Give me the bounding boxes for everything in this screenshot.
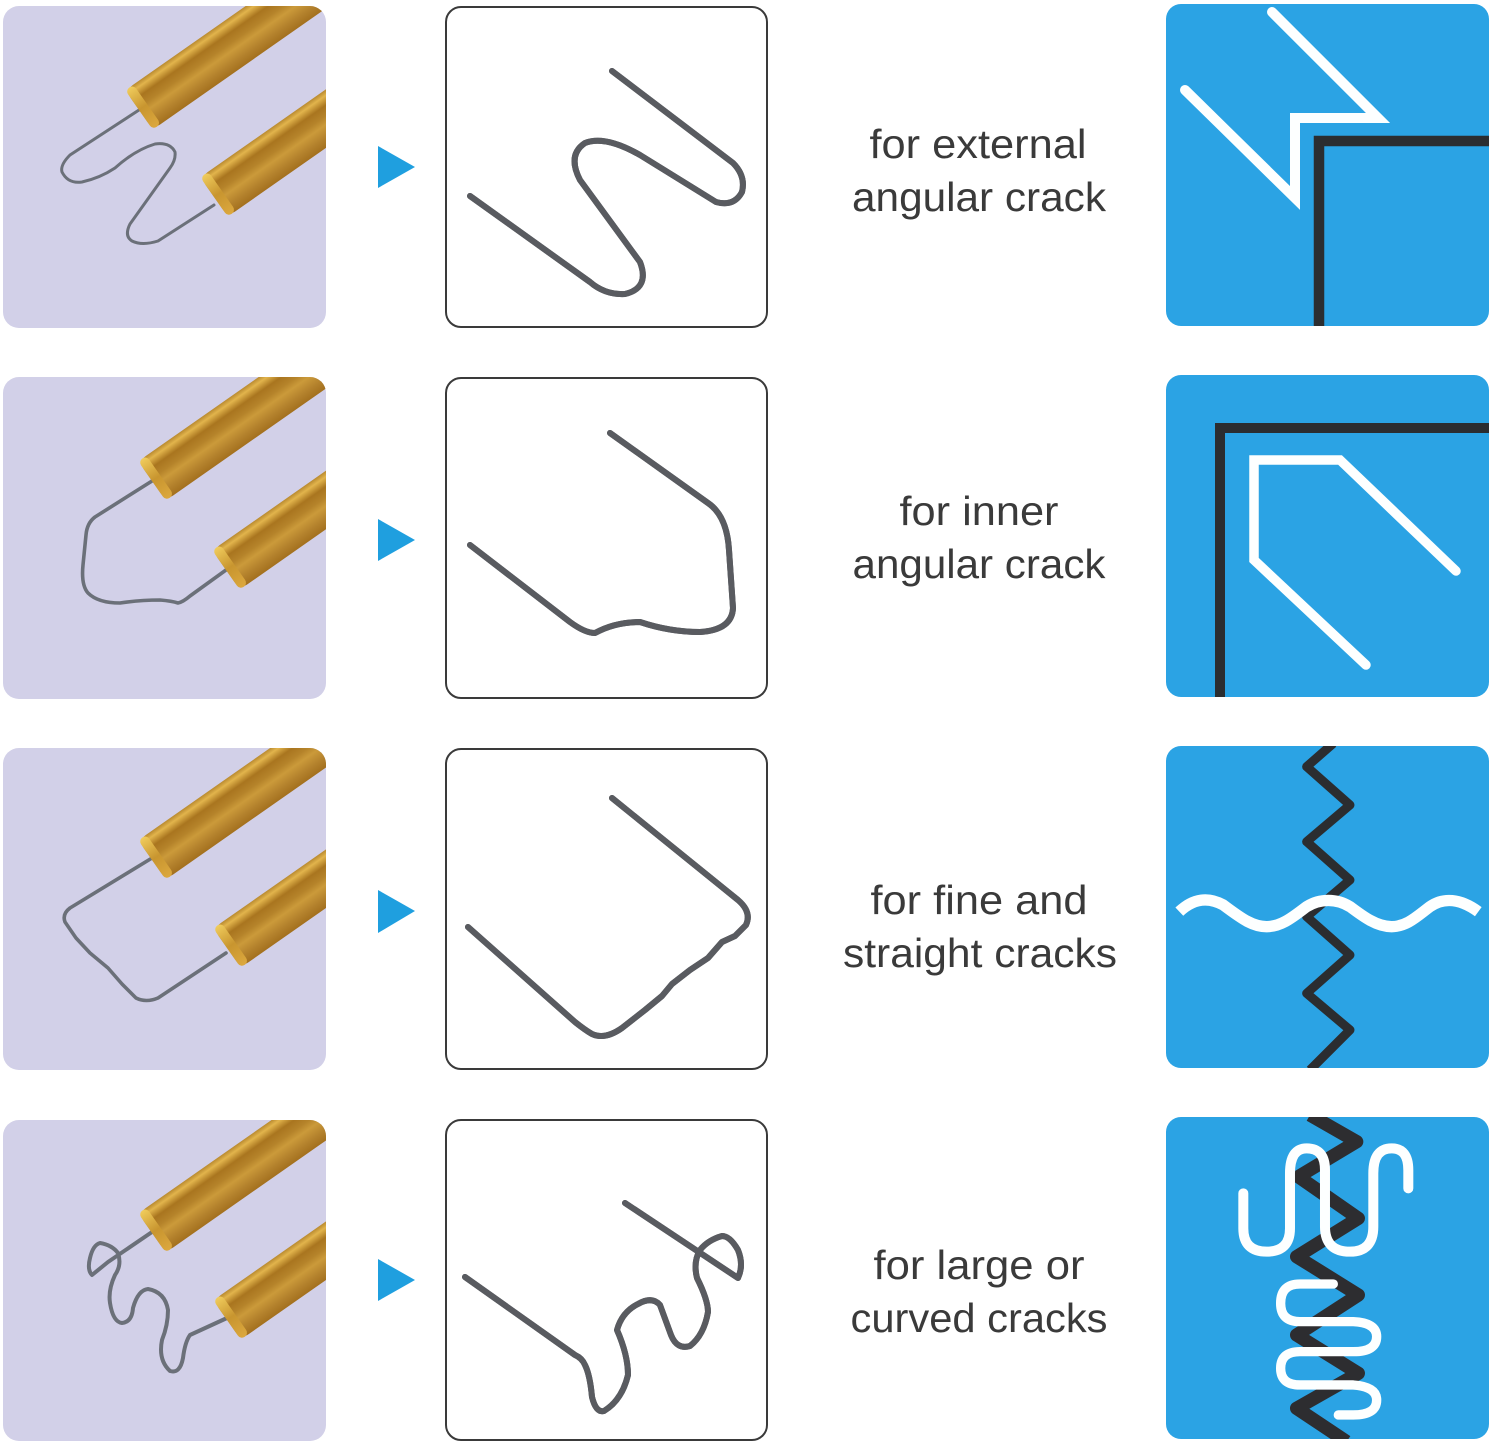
label: for external angular crack: for external xyxy=(870,121,1086,167)
arrow row 4 xyxy=(378,1259,415,1301)
panel: staple close-up, row 4 xyxy=(446,1120,767,1440)
panel: staple close-up, row 2 xyxy=(446,378,767,698)
label: for large or curved cracks: curved cracks xyxy=(850,1295,1108,1341)
row 2: inner angular crack xyxy=(3,375,1489,699)
arrow row 3 xyxy=(378,890,415,933)
row 3: fine and straight cracks xyxy=(3,746,1489,1070)
row 1: external angular crack xyxy=(3,0,1492,330)
row 4: large or curved cracks xyxy=(3,1117,1489,1441)
panel: soldering tips with staple, row 1 xyxy=(3,6,326,328)
icon: fine and straight cracks xyxy=(1166,743,1489,1070)
arrow row 1 xyxy=(378,146,415,188)
icon: large or curved cracks xyxy=(1166,1115,1489,1442)
label: for external angular crack xyxy=(852,121,1107,220)
label: for fine and straight cracks xyxy=(843,877,1117,976)
panel: staple close-up, row 3 xyxy=(446,749,767,1069)
label: for inner angular crack: for inner xyxy=(900,488,1058,534)
label: for inner angular crack xyxy=(852,488,1106,587)
panel: soldering tips with staple, row 4 xyxy=(3,1120,326,1441)
label: for external angular crack: angular crack xyxy=(852,174,1107,220)
label: for inner angular crack: angular crack xyxy=(852,541,1106,587)
panel: soldering tips with staple, row 2 xyxy=(3,377,326,699)
panel: soldering tips with staple, row 3 xyxy=(3,748,326,1070)
icon: external angular crack xyxy=(1166,4,1492,330)
panel: staple close-up, row 1 xyxy=(446,7,767,327)
label: for large or curved cracks: for large or xyxy=(874,1242,1084,1288)
icon: inner angular crack xyxy=(1166,375,1492,700)
label: for fine and straight cracks: straight cracks xyxy=(843,930,1117,976)
arrow row 2 xyxy=(378,519,415,561)
label: for fine and straight cracks: for fine and xyxy=(870,877,1088,923)
label: for large or curved cracks xyxy=(850,1242,1108,1341)
